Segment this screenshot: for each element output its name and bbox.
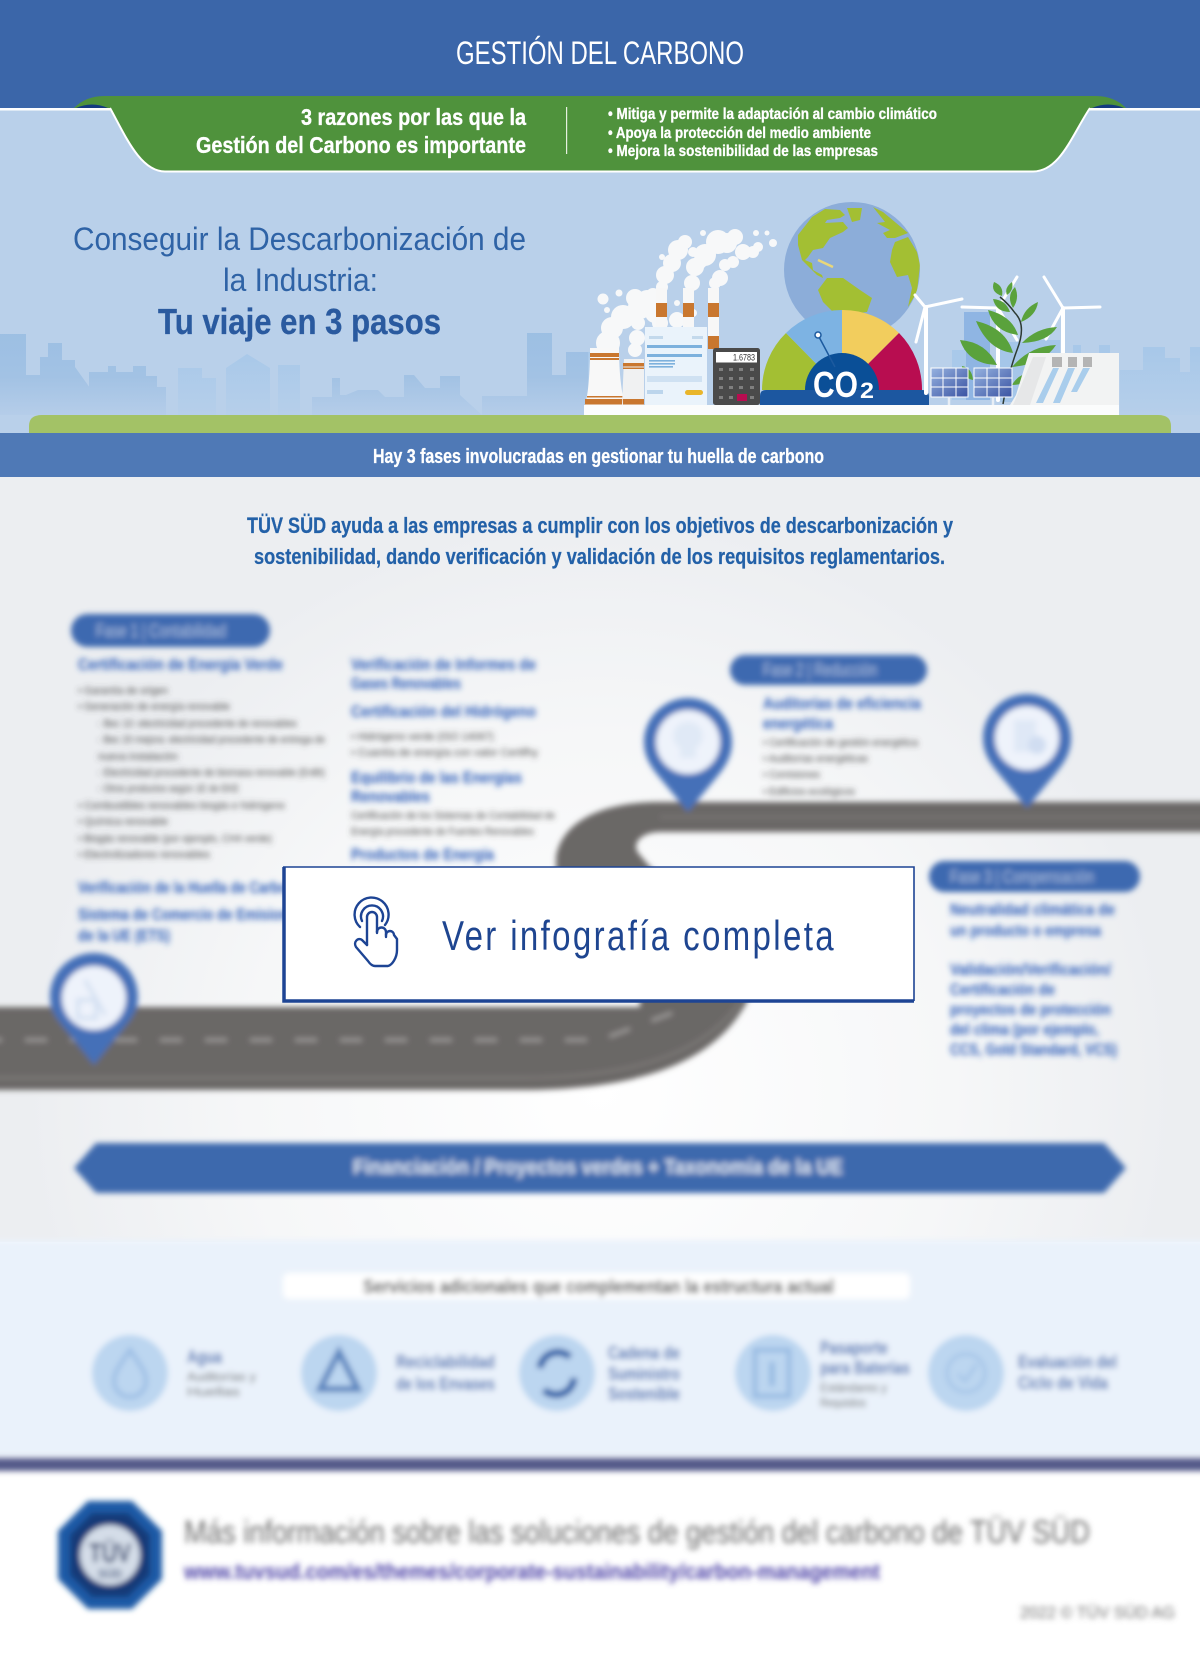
- call to action label: Ver infografía completa: [442, 912, 836, 959]
- header background: [0, 0, 1200, 108]
- buildings behind plant: [952, 312, 1060, 402]
- footer blurred content: [0, 1458, 1200, 1622]
- phase 2 column: [763, 694, 921, 798]
- phase 2 column: • Certificación de gestión energética: [763, 737, 919, 749]
- phase 3 column: un producto o empresa: [950, 921, 1101, 940]
- service: life cycle: Evaluación del: [1018, 1352, 1117, 1372]
- ribbon bullet list: • Mejora la sostenibilidad de las empresas: [608, 143, 878, 160]
- road: [0, 802, 1200, 1090]
- phase 1 pill: Fase 1 | Contabilidad: [96, 621, 226, 641]
- solar panels: [931, 368, 1012, 405]
- phase 1 column B: Verificación de Informes de: [351, 655, 536, 674]
- phase 1 column A: Verificación de la Huella de Carbono: [78, 878, 303, 897]
- hero heading: Conseguir la Descarbonización de: [73, 221, 526, 257]
- phase 1 column B: Renovables: [351, 787, 430, 806]
- wind turbines: [915, 277, 1100, 400]
- phase 3 column: Certificación de: [950, 980, 1055, 999]
- hero heading: la Industria:: [223, 262, 378, 298]
- phase 1 column A: • Generación de energía renovable: [78, 701, 230, 713]
- cooling towers: [585, 348, 644, 405]
- phase 1 column B: Gases Renovables: [351, 674, 461, 693]
- phase 2 pill: Fase 2 | Reducción: [763, 660, 877, 680]
- phase 1 column B: • Cuantía de energía con valor Certifhy: [351, 747, 538, 759]
- service: supply chain: Suministro: [608, 1364, 680, 1384]
- phase 1 column A: de la UE (ETS): [78, 926, 170, 945]
- ribbon heading: 3 razones por las que la: [301, 104, 526, 130]
- white ground strip: [584, 405, 1119, 415]
- CO2 gauge: 2: [860, 378, 874, 403]
- phases bar: Hay 3 fases involucradas en gestionar tu huella de carbono: [373, 446, 824, 468]
- phase 3 pill: Fase 3 | Compensación: [950, 867, 1094, 887]
- hero heading: Tu viaje en 3 pasos: [158, 301, 441, 342]
- phase 1 column B: Energía procedente de Fuentes Renovables: [351, 826, 534, 838]
- hero skyline: [0, 333, 1200, 415]
- map pin 1: [50, 953, 138, 1065]
- phase 2 column: Auditorías de eficiencia: [763, 694, 921, 713]
- TÜV SÜD logo: [58, 1501, 162, 1609]
- ground green bar: [29, 415, 1171, 433]
- service: life cycle: [928, 1335, 1117, 1411]
- chimneys: [656, 288, 719, 349]
- phase 1 column A: - Bec 10: electricidad procedente de renovables: [98, 718, 297, 730]
- call to action box: [283, 867, 914, 1001]
- intro text: sostenibilidad, dando verificación y validación de los requisitos reglamentarios.: [254, 544, 945, 569]
- service: supply chain: [519, 1335, 680, 1411]
- ribbon bullet list: [608, 106, 937, 160]
- service: battery passport: Pasaporte: [820, 1338, 888, 1358]
- blurred content: roadmap and services: [0, 614, 1200, 1457]
- phase 3 column: [950, 900, 1117, 1059]
- footer background: [0, 1466, 1200, 1660]
- plant: [960, 282, 1057, 404]
- intro text: TÜV SÜD ayuda a las empresas a cumplir con los objetivos de descarbonización y: [247, 513, 954, 538]
- phase 1 column A: - Bec 20 mejora: electricidad procedente de entrega de: [98, 734, 325, 746]
- phase 1 column A: - Otros productos según 1E de EKE: [98, 783, 239, 795]
- phase 1 column A: • Garantía de origen: [78, 685, 168, 697]
- service: recyclability: de los Envases: [396, 1374, 495, 1394]
- map pin 3: [983, 694, 1071, 808]
- phase 1 column A: Sistema de Comercio de Emisiones: [78, 905, 303, 924]
- service: battery passport: Requisitos: [820, 1395, 866, 1410]
- CO2 gauge: [760, 310, 929, 405]
- title: GESTIÓN DEL CARBONO: [456, 35, 744, 71]
- service: battery passport: para Baterías: [820, 1358, 910, 1378]
- service: recyclability: [301, 1335, 495, 1411]
- service: life cycle: Ciclo de Vida: [1018, 1373, 1109, 1393]
- phase 1 column A: [78, 655, 325, 945]
- ribbon heading: Gestión del Carbono es importante: [196, 132, 526, 158]
- footer url: www.tuvsud.com/es/themes/corporate-sustainability/carbon-management: [183, 1559, 881, 1584]
- invoice document: [645, 327, 707, 405]
- illustration: decarbonisation scene: [584, 202, 1119, 427]
- phase 1 column B: Certificación del Hidrógeno: [351, 702, 536, 721]
- smoke plumes: [596, 229, 777, 357]
- phase 2 column: • Comisiones: [763, 769, 820, 781]
- financing banner: [74, 1143, 1126, 1193]
- phase 2 column: • Edificios ecológicos: [763, 786, 855, 798]
- hero heading: [73, 221, 526, 342]
- phase 1 column B: Equilibrio de las Energías: [351, 768, 522, 787]
- service: supply chain: Cadena de: [608, 1343, 680, 1363]
- service: battery passport: [735, 1335, 910, 1411]
- green ribbon: 3 reasons: [74, 96, 1126, 172]
- dam: [1010, 353, 1119, 405]
- ribbon heading: [196, 104, 526, 158]
- phase 1 column B: [351, 655, 555, 864]
- icon: tapping hand: [355, 898, 397, 966]
- phase 1 column A: - Electricidad procedente de biomasa renovable (EnBt): [98, 767, 325, 779]
- footer band: [0, 1458, 1200, 1471]
- service: recyclability: Reciclabilidad: [396, 1352, 495, 1372]
- phase 3 pill: [929, 861, 1140, 892]
- phase 1 column A: • Química renovable: [78, 816, 168, 828]
- phase 3 column: del clima (por ejemplo,: [950, 1020, 1099, 1039]
- phase 1 column A: nueva instalación: [98, 751, 178, 763]
- service: water: Auditorías y: [187, 1369, 256, 1384]
- service: supply chain: Sostenible: [608, 1384, 680, 1404]
- content background: [0, 477, 1200, 1242]
- phase 3 column: CCS, Gold Standard, VCS): [950, 1040, 1117, 1059]
- TÜV SÜD logo: TÜV: [89, 1538, 131, 1568]
- service: water: Huellas: [187, 1384, 241, 1399]
- phase 1 column A: • Electrolizadores renovables: [78, 849, 210, 861]
- phase 3 column: proyectos de protección: [950, 1000, 1111, 1019]
- service: water: [92, 1335, 256, 1411]
- phase 1 pill: [71, 614, 270, 647]
- CO2 gauge: CO: [813, 364, 858, 405]
- hero background: [0, 108, 1200, 433]
- phase 1 column A: • Combustibles renovables biogás e hidrógeno: [78, 800, 285, 812]
- phase 3 column: Validación/Verificación/: [950, 960, 1111, 979]
- services heading: Servicios adicionales que complementan la estructura actual: [363, 1277, 834, 1298]
- calculator: 1.6783: [733, 352, 755, 362]
- phase 2 pill: [730, 655, 927, 685]
- service: battery passport: Estándares y: [820, 1380, 887, 1395]
- copyright: 2022 © TÜV SÜD AG: [1020, 1603, 1175, 1622]
- phase 1 column B: Certificación de los Sistemas de Contabilidad de: [351, 810, 555, 822]
- phase 2 column: energética: [763, 714, 833, 733]
- phase 1 column B: • Hidrógeno verde (ISO 14067): [351, 731, 494, 743]
- phases bar: [0, 433, 1200, 477]
- calculator: [713, 348, 760, 405]
- globe: [784, 202, 920, 338]
- phase 1 column A: • Biogás renovable (por ejemplo, CH4 verde): [78, 833, 272, 845]
- additional services panel: [0, 1240, 1200, 1457]
- TÜV SÜD logo: SÜD: [98, 1566, 122, 1581]
- phase 1 column B: Productos de Energía: [351, 845, 494, 864]
- phase 1 column A: Certificación de Energía Verde: [78, 655, 283, 674]
- map pin 2: [644, 698, 732, 812]
- ribbon bullet list: • Apoya la protección del medio ambiente: [608, 125, 871, 142]
- phase 3 column: Neutralidad climática de: [950, 900, 1115, 919]
- financing banner: Financiación / Proyectos verdes + Taxonomía de la UE: [353, 1156, 843, 1179]
- intro text: [247, 513, 954, 569]
- phase 2 column: • Auditorías energéticas: [763, 753, 868, 765]
- ribbon bullet list: • Mitiga y permite la adaptación al cambio climático: [608, 106, 937, 123]
- service: water: Agua: [187, 1347, 223, 1367]
